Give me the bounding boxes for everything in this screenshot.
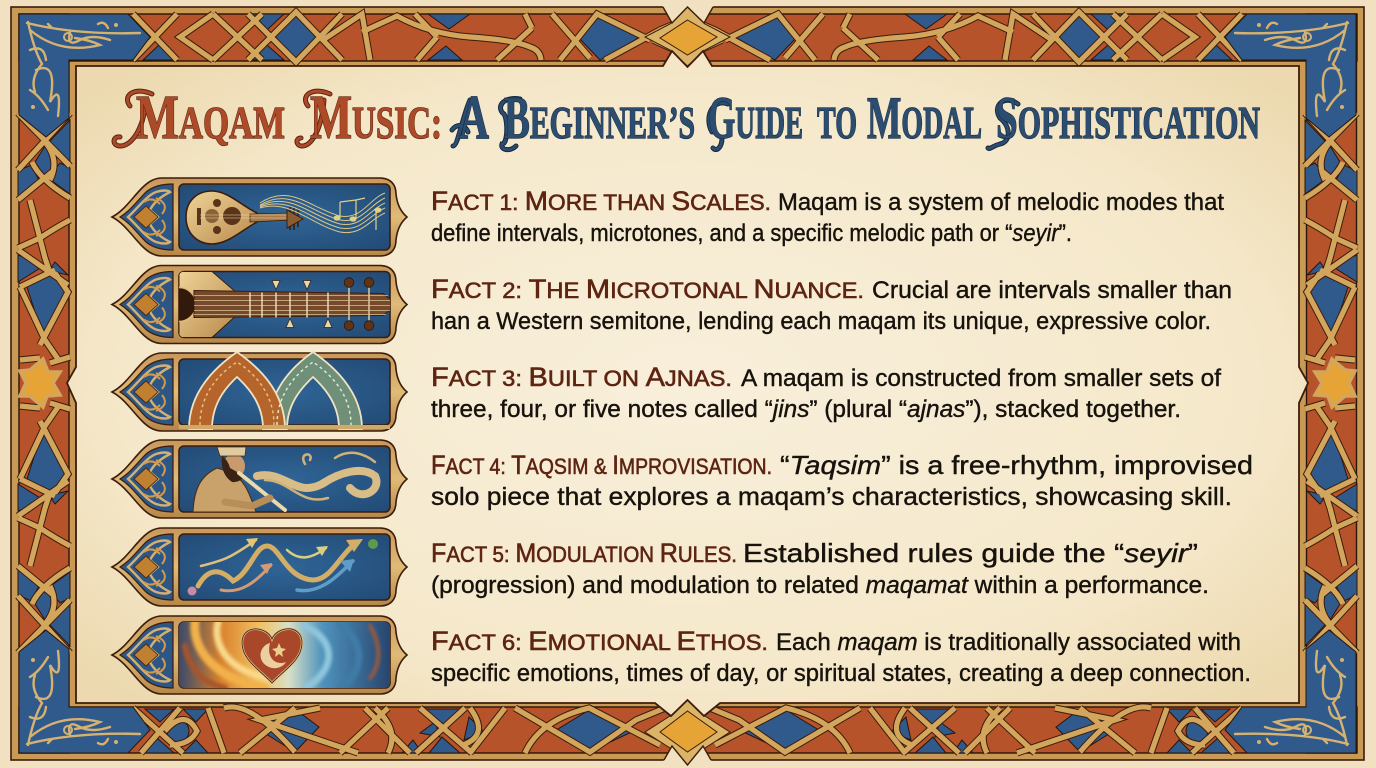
icon banner 1: oud and music staff (112, 178, 407, 256)
fact 2 (431, 274, 1232, 335)
title: MODAL (867, 85, 982, 151)
top centre diamond (645, 0, 730, 66)
corner: bottom-left (19, 630, 150, 753)
fact 1: FACT 1: MORE THAN SCALES. (431, 186, 771, 216)
title: A (459, 84, 489, 152)
title: BEGINNER’S (504, 85, 695, 151)
fact 5 (431, 538, 1209, 599)
fact 3: three, four, or five notes called “jins” (plural “ajnas”), stacked together. (431, 396, 1181, 423)
fact 2: Crucial are intervals smaller than (872, 277, 1232, 304)
icon banner 3: overlapping arches (ajnas) (112, 352, 407, 431)
fact 1 (431, 186, 1224, 247)
fact 5: FACT 5: MODULATION RULES. (431, 538, 737, 568)
fact 2: han a Western semitone, lending each maqam its unique, expressive color. (431, 308, 1211, 335)
inner parchment panel (67, 51, 1308, 716)
fact 6 (431, 626, 1251, 687)
icon banner 2: fretboard (112, 266, 407, 344)
icon banner 5: modulation arrows (112, 528, 407, 606)
star ornaments (20, 359, 1355, 407)
icon banner 4: flute player with melodic swirl (112, 440, 407, 518)
fact 1: define intervals, microtones, and a specific melodic path or “seyir”. (431, 220, 1072, 247)
title: GUIDE (708, 85, 803, 151)
fact 4: “Taqsim ” is a free-rhythm, improvised (780, 450, 1253, 480)
corner: top-left (19, 14, 150, 137)
fact 6: Each maqam is traditionally associated with (776, 629, 1241, 656)
corner: bottom-right (1225, 630, 1356, 753)
title: TO (817, 97, 857, 148)
fact 4: FACT 4: TAQSIM & IMPROVISATION. (431, 450, 772, 480)
bottom centre diamond (645, 700, 730, 768)
fact 4: solo piece that explores a maqam’s characteristics, showcasing skill. (431, 483, 1232, 511)
fact 6: specific emotions, times of day, or spiritual states, creating a deep connection. (431, 660, 1251, 687)
fact 2: FACT 2: THE MICROTONAL NUANCE. (431, 274, 864, 304)
icon banner 6: emotional heart in nebula (112, 616, 407, 694)
fact 3 (431, 362, 1221, 423)
title (114, 84, 1260, 152)
title: MUSIC: (310, 84, 442, 152)
fact 3: FACT 3: BUILT ON AJNAS. (431, 362, 732, 392)
fact 6: FACT 6: EMOTIONAL ETHOS. (431, 626, 768, 656)
corner: top-right (1225, 14, 1356, 137)
fact 5: (progression) and modulation to related maqamat within a performance. (431, 572, 1209, 599)
fact 1: Maqam is a system of melodic modes that (778, 189, 1224, 216)
title: MAQAM (136, 84, 285, 152)
fact 3: A maqam is constructed from smaller sets of (741, 365, 1221, 392)
fact 4 (431, 450, 1253, 511)
fact 5: Established rules guide the “ seyir ” (743, 538, 1198, 568)
